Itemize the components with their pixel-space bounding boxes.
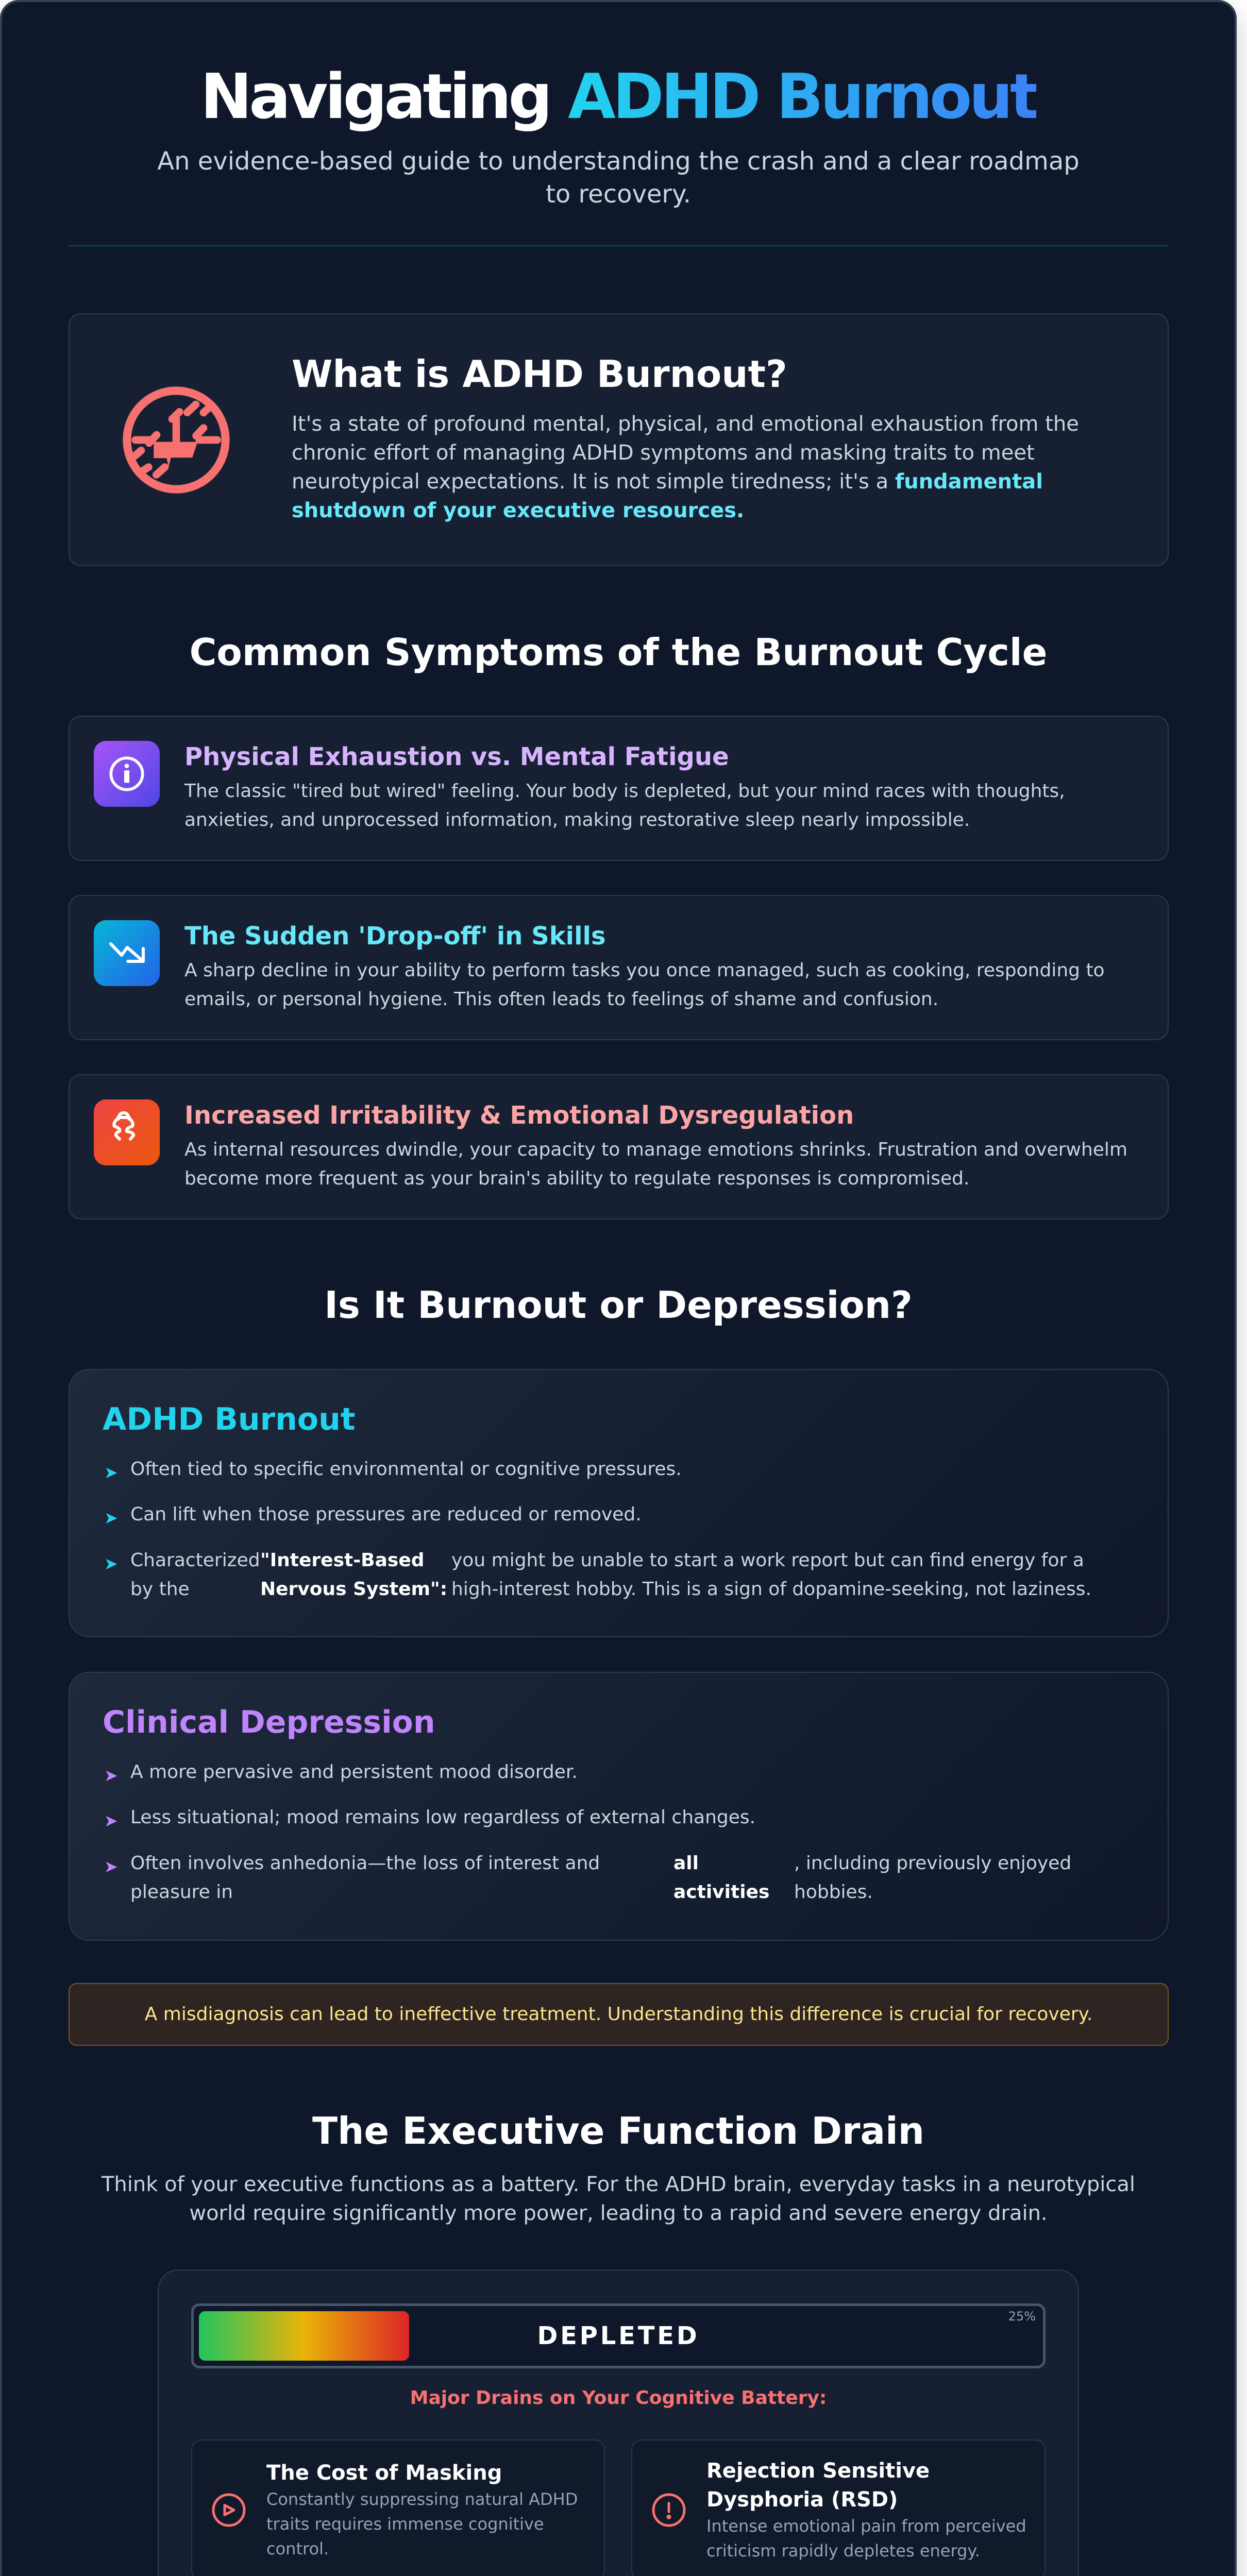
icon: alert circle bbox=[652, 2494, 685, 2527]
intro text bbox=[101, 2173, 1135, 2225]
bullet list: Nervous System": bbox=[260, 1579, 447, 1600]
bullet list: Often involves anhedonia—the loss of interest and bbox=[130, 1853, 600, 1874]
heading: What is ADHD Burnout? bbox=[292, 352, 787, 396]
bullet list: Less situational; mood remains low regardless of external changes. bbox=[130, 1807, 755, 1828]
subtitle bbox=[157, 147, 1080, 209]
heading: executive function drain: The Executive Function Drain bbox=[312, 2109, 924, 2153]
bullet list: activities bbox=[673, 1882, 769, 1903]
bullet list: hobbies. bbox=[794, 1882, 873, 1903]
subtitle: to recovery. bbox=[546, 180, 691, 209]
bullet list bbox=[104, 1761, 1071, 1903]
panel heading: Clinical Depression bbox=[103, 1704, 435, 1740]
bullet list: ➤ bbox=[104, 1811, 118, 1831]
panel: clinical depression bbox=[69, 1672, 1169, 1941]
subtitle: An evidence-based guide to understanding the crash and a clear roadmap bbox=[157, 147, 1080, 176]
drain text: traits requires immense cognitive bbox=[266, 2514, 544, 2534]
bullet list: ➤ bbox=[104, 1463, 118, 1482]
symptom text: The classic "tired but wired" feeling. Your body is depleted, but your mind races with thoughts, bbox=[184, 781, 1065, 802]
symptom text: become more frequent as your brain's ability to regulate responses is compromised. bbox=[184, 1168, 969, 1189]
drain text bbox=[266, 2489, 578, 2558]
bullet list: ➤ bbox=[104, 1508, 118, 1528]
drains heading: Major Drains on Your Cognitive Battery: bbox=[410, 2387, 827, 2409]
symptom text bbox=[184, 1139, 1127, 1189]
callout: misdiagnosis bbox=[69, 1983, 1169, 2046]
bullet list: ➤ bbox=[104, 1857, 118, 1876]
definition text: It's a state of profound mental, physical, and emotional exhaustion from the bbox=[292, 412, 1079, 436]
panel: ADHD burnout bbox=[69, 1369, 1169, 1637]
symptom text: anxieties, and unprocessed information, making restorative sleep nearly impossible. bbox=[184, 809, 970, 831]
icon: emotional squiggle bbox=[94, 1099, 160, 1165]
drain title: The Cost of Masking bbox=[266, 2461, 502, 2485]
drain text bbox=[706, 2514, 1026, 2563]
icon: trend down bbox=[94, 920, 160, 986]
bullet list: , including previously enjoyed bbox=[794, 1853, 1071, 1874]
panel: symptom 2 bbox=[69, 895, 1169, 1040]
symptom title: Physical Exhaustion vs. Mental Fatigue bbox=[184, 742, 729, 771]
drain: RSD bbox=[631, 2439, 1046, 2576]
intro text: Think of your executive functions as a battery. For the ADHD brain, everyday tasks in a neurotypical bbox=[102, 2173, 1135, 2196]
drain text: Constantly suppressing natural ADHD bbox=[266, 2489, 578, 2509]
title: Navigating ADHD Burnout bbox=[200, 61, 1036, 133]
bullet list bbox=[104, 1459, 1091, 1600]
battery fill bbox=[199, 2311, 409, 2361]
bullet list: Characterized bbox=[130, 1550, 260, 1571]
bullet list: Often tied to specific environmental or cognitive pressures. bbox=[130, 1459, 682, 1480]
panel: symptom 3 bbox=[69, 1074, 1169, 1219]
bullet list: A more pervasive and persistent mood disorder. bbox=[130, 1761, 578, 1783]
heading: comparison: Is It Burnout or Depression? bbox=[324, 1283, 913, 1327]
definition text: neurotypical expectations. It is not simple tiredness; it's a fundamental bbox=[292, 470, 1043, 494]
symptom title: The Sudden 'Drop-off' in Skills bbox=[184, 922, 606, 951]
intro text: world require significantly more power, leading to a rapid and severe energy drain. bbox=[189, 2201, 1048, 2225]
drain text: criticism rapidly depletes energy. bbox=[706, 2541, 980, 2561]
icon: play circle bbox=[212, 2494, 245, 2527]
symptom title: Increased Irritability & Emotional Dysregulation bbox=[184, 1101, 854, 1130]
bullet list: ➤ bbox=[104, 1766, 118, 1785]
bullet list: Can lift when those pressures are reduced or removed. bbox=[130, 1504, 642, 1525]
drain text: Intense emotional pain from perceived bbox=[706, 2516, 1026, 2536]
callout: misdiagnosis: A misdiagnosis can lead to ineffective treatment. Understanding this difference is crucial for recovery. bbox=[145, 2004, 1092, 2025]
drain title: Dysphoria (RSD) bbox=[706, 2488, 898, 2512]
bullet list: you might be unable to start a work report but can find energy for a bbox=[451, 1550, 1084, 1571]
bullet list: ➤ bbox=[104, 1554, 118, 1573]
panel heading: ADHD Burnout bbox=[103, 1401, 356, 1437]
symptom text: emails, or personal hygiene. This often leads to feelings of shame and confusion. bbox=[184, 989, 938, 1010]
panel: symptom 1 bbox=[69, 716, 1169, 861]
battery percent: 25% bbox=[1008, 2309, 1036, 2324]
drain: masking bbox=[191, 2439, 605, 2576]
drain text: control. bbox=[266, 2539, 329, 2558]
drain title: Rejection Sensitive bbox=[706, 2459, 930, 2483]
battery label: DEPLETED bbox=[537, 2321, 699, 2350]
panel: what is ADHD burnout bbox=[69, 313, 1169, 566]
bullet list: by the bbox=[130, 1579, 190, 1600]
drain title bbox=[706, 2459, 930, 2512]
symptom text: A sharp decline in your ability to perform tasks you once managed, such as cooking, responding to bbox=[184, 960, 1105, 981]
symptom text bbox=[184, 781, 1065, 831]
bullet list: pleasure in bbox=[130, 1882, 233, 1903]
bullet list: high-interest hobby. This is a sign of dopamine-seeking, not laziness. bbox=[451, 1579, 1091, 1600]
symptom text bbox=[184, 960, 1105, 1010]
icon: info bbox=[94, 741, 160, 807]
symptom text: As internal resources dwindle, your capacity to manage emotions shrinks. Frustration and overwhelm bbox=[184, 1139, 1127, 1160]
definition text: shutdown of your executive resources. bbox=[292, 499, 744, 522]
definition text bbox=[292, 412, 1079, 522]
definition text: chronic effort of managing ADHD symptoms and masking traits to meet bbox=[292, 441, 1035, 465]
bullet list: "Interest-Based bbox=[260, 1550, 425, 1571]
icon: burnout brain bbox=[123, 386, 230, 494]
heading: symptoms: Common Symptoms of the Burnout Cycle bbox=[190, 631, 1047, 674]
bullet list: all bbox=[673, 1853, 699, 1874]
panel: battery bbox=[158, 2269, 1079, 2576]
battery bar bbox=[191, 2303, 1046, 2368]
